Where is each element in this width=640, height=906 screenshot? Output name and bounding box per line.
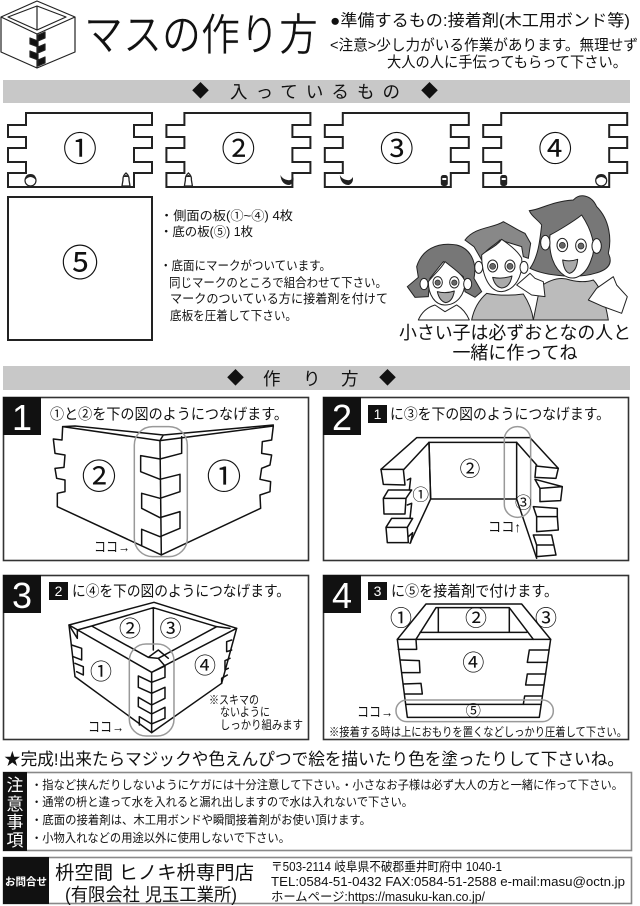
heading: how to make: り — [303, 369, 320, 389]
completion message: ★完成!出来たらマジックや色えんぴつで絵を描いたり色を塗ったりして下さいね。 — [4, 750, 624, 769]
diagram: joining 1 and 2: ② — [82, 459, 116, 497]
step number 2: 2 — [332, 397, 352, 438]
instruction: に④を下の図のようにつなげます。 — [72, 583, 290, 600]
illustration: three people — [407, 196, 627, 320]
heading: contents — [3, 80, 630, 103]
caution label: 意 — [6, 795, 24, 814]
note: no gaps — [209, 693, 303, 732]
diagram: joining 4: ② — [119, 617, 141, 642]
icon: boy — [596, 174, 607, 186]
diagram: joining 4: ④ — [194, 653, 216, 678]
contact label — [3, 857, 49, 904]
caution label: 事 — [6, 813, 24, 832]
title: マスの作り方 — [84, 11, 318, 60]
note: no gaps: ないように — [220, 705, 270, 719]
diagram: joining 4: ① — [90, 659, 112, 684]
caption — [399, 323, 631, 363]
diagram: attaching base 5: ⑤ — [466, 703, 481, 720]
panel: step 2 — [323, 397, 628, 560]
label: here: ココ→ — [88, 719, 124, 735]
text block: contents list: 同じマークのところで組合わせて下さい。 — [169, 276, 387, 290]
caution note — [330, 37, 638, 71]
caution label — [3, 772, 27, 851]
text block: contents list — [160, 208, 388, 323]
shop name — [55, 862, 254, 905]
panel: step 3 — [3, 575, 308, 740]
diagram: joining 1 and 2: ① — [207, 459, 241, 497]
shop name: 枡空間 ヒノキ枡専門店 — [55, 862, 254, 884]
contact details: ホームページ:https://masuku-kan.co.jp/ — [271, 890, 486, 904]
caution label: 項 — [6, 831, 24, 850]
contact details: TEL:0584-51-0432 FAX:0584-51-2588 e-mail:masu@octn.jp — [271, 875, 625, 889]
panel: board 3 — [325, 113, 469, 187]
step number 4: 4 — [332, 575, 352, 616]
diagram: joining 3: ① — [412, 485, 429, 504]
caution note: <注意>少し力がいる作業があります。無理せず — [330, 37, 638, 54]
text block: contents list: ・底の板(⑤) 1枚 — [160, 224, 253, 239]
caution note: 大人の人に手伝ってもらって下さい。 — [387, 54, 627, 71]
caution list — [31, 777, 623, 845]
caution list: ・通常の枡と違って水を入れると漏れ出しますので水は入れないで下さい。 — [31, 795, 413, 809]
diagram: attaching base 5: ③ — [535, 606, 557, 631]
heading: how to make: 作 — [263, 369, 280, 389]
diagram: joining 1 and 2 — [53, 425, 273, 557]
icon: tanuki — [441, 175, 448, 186]
diagram: attaching base 5: ④ — [462, 650, 484, 675]
panel: board 5: ⑤ — [62, 243, 98, 284]
diagram: attaching base 5: ② — [465, 606, 487, 631]
panel: step 4 — [323, 575, 628, 740]
step number 2 — [323, 397, 361, 438]
step number 1: 1 — [12, 397, 32, 438]
heading: contents: ◆ — [421, 82, 438, 101]
text block: contents list: 底板を圧着して下さい。 — [170, 308, 297, 323]
contact details: 〒503-2114 岐阜県不破郡垂井町府中 1040-1 — [271, 859, 502, 874]
icon: penguin — [184, 173, 192, 186]
heading: contents: ◆ — [192, 82, 209, 101]
icon: boy — [25, 174, 36, 186]
heading: how to make: ◆ — [379, 369, 396, 388]
contact details — [271, 859, 625, 904]
panel: board 1 — [8, 113, 152, 187]
panel: board 5 — [8, 197, 152, 340]
icon: penguin — [122, 173, 130, 186]
diagram: joining 4 — [69, 602, 237, 736]
panel: board 3: ③ — [380, 131, 414, 169]
contact label: お問合せ — [5, 875, 47, 888]
caution list: ・小物入れなどの用途以外に使用しないで下さい。 — [31, 830, 290, 845]
preparation note: ●準備するもの:接着剤(木工用ボンド等) — [330, 11, 630, 30]
instruction: 1 — [374, 406, 382, 422]
caption: 一緒に作ってね — [452, 343, 578, 363]
heading: how to make — [3, 366, 630, 390]
diagram: joining 3: ② — [460, 458, 480, 481]
shop name: (有限会社 児玉工業所) — [65, 885, 237, 905]
diagram: attaching base 5 — [390, 604, 557, 722]
panel: board 2: ② — [221, 131, 255, 169]
text block: contents list: マークのついている方に接着剤を付けて — [170, 291, 388, 306]
heading: contents: 入っているもの — [230, 82, 400, 102]
text block: contents list: ・側面の板(①~④) 4枚 — [160, 208, 294, 223]
heading: how to make: ◆ — [227, 369, 244, 388]
panel: board 1: ① — [63, 131, 97, 169]
label: here: ココ→ — [94, 539, 130, 555]
icon: bird — [280, 175, 294, 185]
note: no gaps: ※スキマの — [209, 693, 259, 707]
panel: cautions — [3, 772, 632, 851]
diagram: attaching base 5: ① — [390, 606, 412, 631]
instruction: 2 — [55, 583, 63, 599]
label: here: ココ↑ — [488, 519, 521, 535]
instruction: に③を下の図のようにつなげます。 — [390, 406, 610, 423]
caption: 小さい子は必ずおとなの人と — [399, 323, 631, 343]
label: here: ココ→ — [357, 704, 393, 720]
icon: masu box — [1, 1, 75, 68]
step number 1 — [3, 397, 41, 438]
step number 3: 3 — [12, 575, 32, 616]
heading: how to make: 方 — [341, 369, 358, 389]
icon: bird — [340, 175, 353, 185]
panel: contact — [3, 857, 632, 905]
caution list: ・底面の接着剤は、木工用ボンドや瞬間接着剤がお使い頂けます。 — [31, 812, 371, 827]
diagram: joining 3 — [381, 427, 562, 558]
panel: step 1 — [3, 397, 308, 560]
step number 3 — [3, 575, 41, 616]
caution label: 注 — [6, 776, 24, 795]
diagram: joining 4: ③ — [160, 617, 182, 642]
instruction: 3 — [374, 583, 382, 599]
instruction: ①と②を下の図のようにつなげます。 — [50, 406, 288, 423]
panel: board 4: ④ — [538, 131, 572, 169]
text block: contents list: ・底面にマークがついています。 — [160, 258, 331, 273]
panel: board 2 — [166, 113, 310, 187]
diagram: joining 3: ③ — [515, 494, 532, 513]
instruction: に⑤を接着剤で付けます。 — [391, 583, 558, 600]
step number 4 — [323, 575, 361, 616]
panel: board 4 — [483, 113, 627, 187]
note: no gaps: しっかり組みます — [220, 718, 303, 732]
icon: tanuki — [500, 175, 507, 186]
